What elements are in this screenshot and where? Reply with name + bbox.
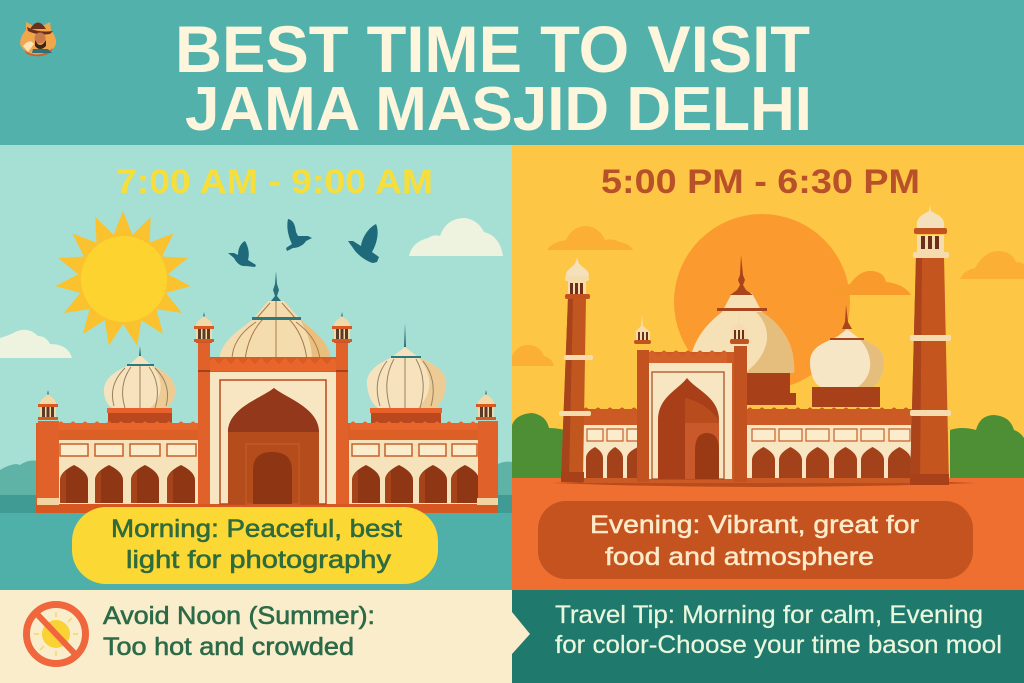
portal: [637, 346, 747, 482]
arrow: [512, 612, 530, 654]
morning ground: [0, 513, 512, 590]
wall: [583, 408, 913, 483]
left dome: [104, 346, 175, 423]
avoid noon text: [103, 602, 375, 661]
callout: morning pill: light for photography: [126, 546, 392, 574]
centre dome: [219, 271, 331, 360]
avoid noon text: Too hot and crowded: [103, 633, 354, 661]
small dome: [810, 305, 884, 407]
right minaret: [910, 205, 951, 485]
title: JAMA MASJID DELHI: [185, 75, 812, 144]
evening clouds: [512, 226, 1024, 366]
end towers: [37, 421, 498, 505]
travel tip text: [555, 601, 1002, 659]
evening trees: [512, 413, 1024, 478]
title: [175, 12, 812, 144]
morning sky: [0, 145, 512, 513]
panel: avoid noon: [0, 590, 512, 683]
right dome: [367, 323, 446, 423]
evening sky: [512, 145, 1024, 480]
travel tip text: for color-Choose your time bason mool: [555, 631, 1002, 659]
left minaret: [559, 257, 593, 482]
evening time heading: 5:00 PM - 6:30 PM: [601, 163, 920, 201]
title: BEST TIME TO VISIT: [175, 12, 810, 86]
callout: morning pill: Morning: Peaceful, best: [111, 515, 402, 543]
icon: setting sun: [674, 214, 850, 390]
callout: evening pill: Evening: Vibrant, great for: [590, 511, 919, 539]
avoid noon text: Avoid Noon (Summer):: [103, 602, 375, 630]
evening ground: [512, 478, 1024, 590]
mosque wall: [36, 423, 498, 513]
panel: morning: [0, 145, 512, 590]
callout: morning pill: [72, 507, 438, 584]
header band: [0, 0, 1024, 145]
travel tip text: Travel Tip: Morning for calm, Evening: [555, 601, 983, 629]
morning water band: [0, 495, 512, 513]
right arcade: [349, 440, 479, 504]
morning hills: [0, 461, 512, 497]
portal chattris: [634, 312, 749, 344]
large dome: [690, 255, 796, 405]
morning clouds: [0, 218, 503, 358]
callout: evening pill: food and atmosphere: [605, 543, 874, 571]
callout: evening pill: [538, 501, 973, 579]
left arcade: [56, 440, 198, 504]
morning time heading: 7:00 AM - 9:00 AM: [116, 163, 433, 201]
morning mosque: [36, 271, 498, 513]
evening mosque: [559, 205, 951, 485]
icon: no sun: [26, 604, 86, 664]
central portal: [196, 340, 350, 504]
icon: birds: [228, 219, 379, 267]
panel: evening: [512, 145, 1024, 590]
icon: morning sun: [55, 211, 191, 346]
panel: travel tip: [512, 590, 1024, 683]
icon: traveller logo: [20, 22, 56, 56]
